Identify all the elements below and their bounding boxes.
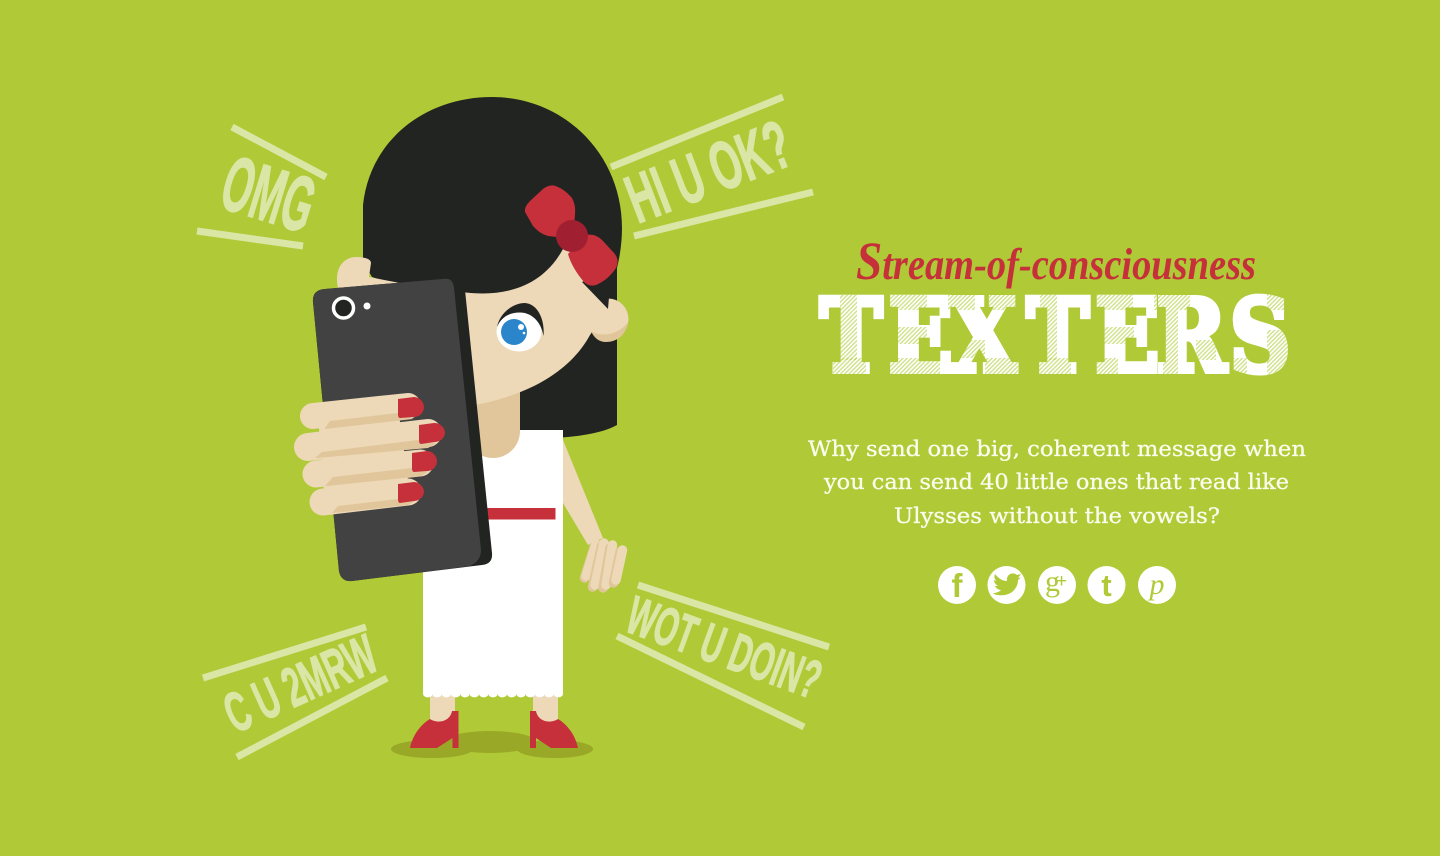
ear [582, 268, 628, 342]
icon: google plus: + [1056, 571, 1067, 592]
stamp: WOT U DOIN?: WOT U DOIN? [619, 585, 829, 711]
thumb [337, 257, 400, 296]
description text: you can send 40 little ones that read like [823, 470, 1289, 494]
stamp: OMG [197, 127, 326, 249]
hand holding phone [308, 397, 445, 513]
camera [334, 298, 370, 318]
stamp: WOT U DOIN? [617, 585, 829, 727]
title: TEXTERS: TEXTERS [820, 277, 1290, 395]
legs [430, 690, 558, 725]
subtitle: Stream-of-consciousness: Stream-of-consciousness [856, 231, 1256, 291]
neck [466, 390, 520, 458]
shoes [410, 711, 578, 748]
face [450, 243, 608, 409]
stamp: OMG: OMG [212, 138, 326, 249]
stamp: HI U OK? [611, 97, 813, 238]
stamp: C U 2MRW: C U 2MRW [214, 622, 386, 745]
icon: google plus: g [1045, 565, 1060, 598]
icon: pinterest: p [1148, 568, 1164, 601]
icon: facebook [938, 566, 976, 604]
hair [363, 97, 622, 438]
hair bow [525, 185, 618, 286]
icon: google plus [1038, 565, 1076, 604]
social icons [938, 565, 1176, 604]
ground shadow [391, 731, 593, 758]
stamp: HI U OK?: HI U OK? [616, 106, 802, 238]
stamp: C U 2MRW [203, 622, 387, 757]
eye [496, 303, 544, 352]
title: TEXTERS [818, 294, 1288, 376]
icon: twitter [988, 566, 1026, 604]
icon: tumblr: t [1101, 568, 1112, 603]
arm [563, 440, 603, 545]
belt [480, 508, 556, 520]
description text: Ulysses without the vowels? [894, 504, 1220, 528]
hand [584, 543, 622, 588]
description text: Why send one big, coherent message when [808, 437, 1306, 461]
icon: pinterest [1138, 566, 1176, 604]
icon: facebook: f [952, 567, 964, 604]
character: girl with phone [308, 97, 628, 758]
phone [313, 278, 492, 581]
description text [808, 437, 1306, 528]
finger shading [315, 413, 437, 513]
icon: tumblr [1088, 566, 1126, 604]
red nails [398, 397, 445, 503]
dress [423, 430, 563, 697]
